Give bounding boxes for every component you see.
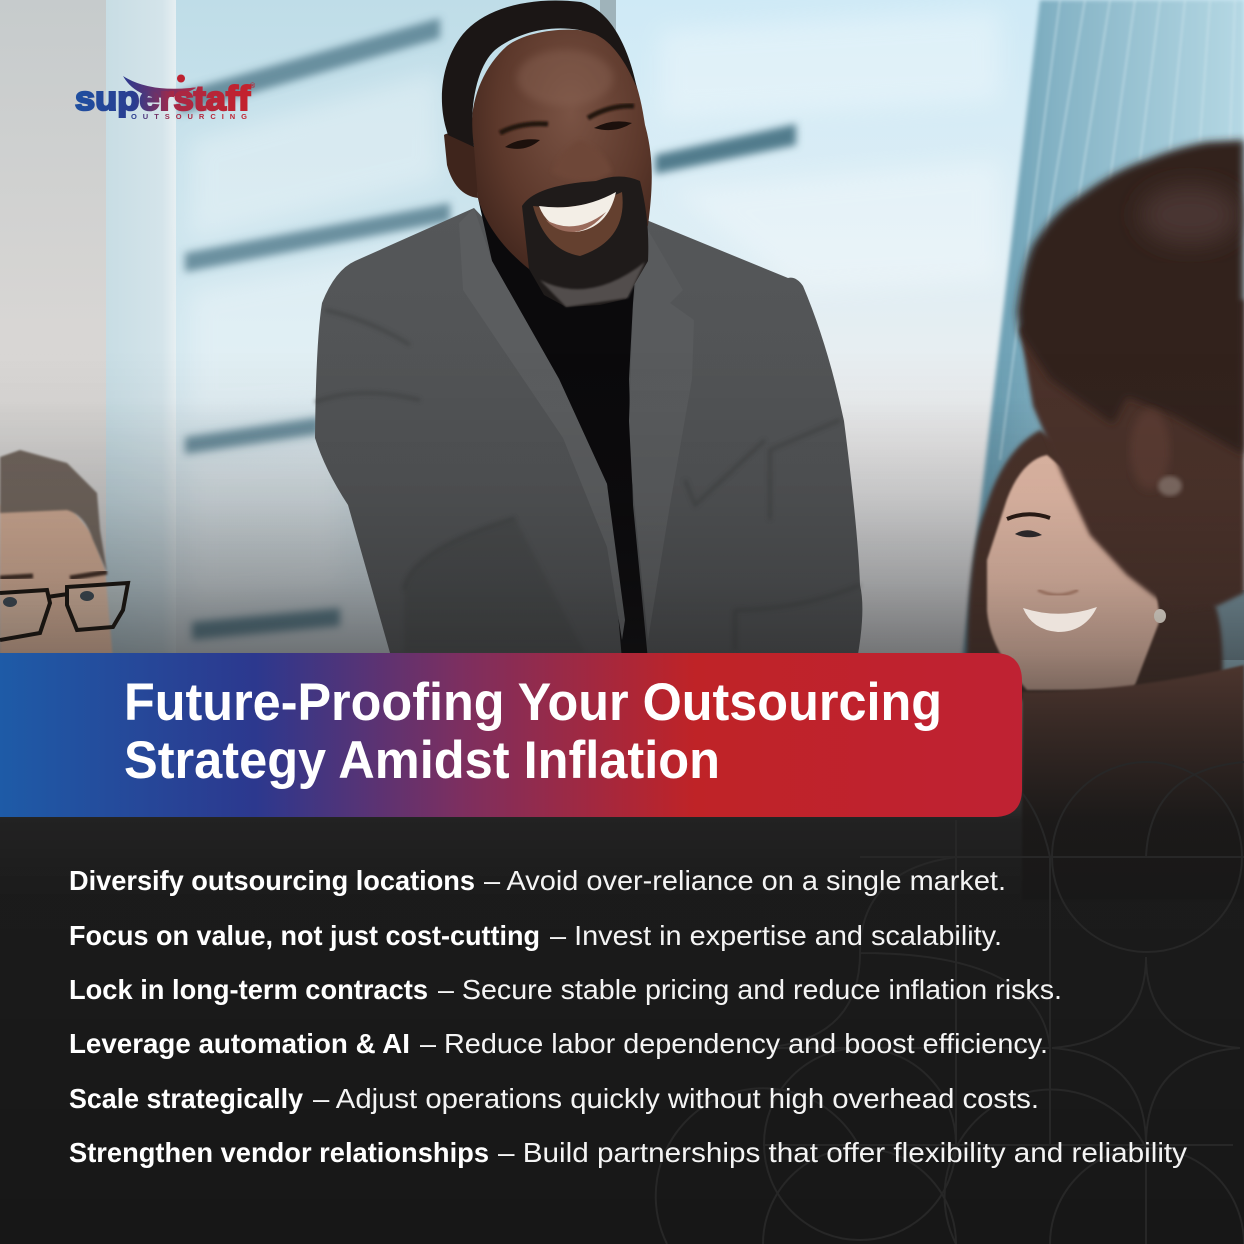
registered mark: ®	[250, 82, 256, 90]
item 6	[69, 1137, 1187, 1168]
title banner	[0, 653, 1022, 817]
logo: SuperStaff Outsourcing	[75, 74, 256, 121]
hair	[442, 0, 637, 147]
logo swoosh	[123, 76, 196, 98]
photo: smiling man in grey blazer	[315, 0, 862, 660]
eyes and brows	[505, 121, 632, 149]
title: Future-Proofing Your Outsourcing	[124, 673, 942, 732]
item 3	[69, 974, 1062, 1005]
item 2: – Invest in expertise and scalability.	[550, 920, 1002, 951]
item 4	[69, 1028, 1048, 1059]
item 6: – Build partnerships that offer flexibility and reliability	[498, 1137, 1187, 1168]
photo: man with glasses at left	[0, 450, 128, 660]
turtleneck	[478, 198, 648, 660]
list of strategies	[69, 865, 1187, 1168]
item 2	[69, 920, 1002, 951]
skin	[1020, 300, 1244, 611]
item 4: – Reduce labor dependency and boost efficiency.	[420, 1028, 1048, 1059]
photo: smiling woman at right	[967, 430, 1223, 700]
ear	[1130, 410, 1170, 490]
faint geometric line pattern	[656, 760, 1244, 1244]
item 2: Focus on value, not just cost-cutting	[69, 920, 540, 951]
forehead highlight	[517, 50, 613, 106]
shoulder	[1022, 665, 1244, 900]
title: Strategy Amidst Inflation	[124, 731, 720, 790]
lapel left	[459, 208, 625, 640]
logo subline: OUTSOURCING	[131, 112, 247, 121]
blazer	[315, 208, 862, 660]
logo wordmark: superstaff	[75, 80, 251, 118]
item 1: Diversify outsourcing locations	[69, 865, 475, 896]
face	[472, 30, 652, 307]
item 6: Strengthen vendor relationships	[69, 1137, 489, 1168]
item 3: Lock in long-term contracts	[69, 974, 428, 1005]
nose	[552, 140, 612, 181]
blazer folds	[315, 310, 860, 650]
hair	[1017, 140, 1244, 455]
item 1	[69, 865, 1006, 896]
item 5: Scale strategically	[69, 1083, 303, 1114]
item 5: – Adjust operations quickly without high overhead costs.	[313, 1083, 1039, 1114]
ear	[444, 133, 478, 198]
lapel right	[629, 223, 694, 640]
logo dot	[177, 74, 185, 82]
item 1: – Avoid over-reliance on a single market.	[484, 865, 1006, 896]
dark fade over lower photo	[0, 350, 1244, 1244]
chin and lip	[533, 192, 623, 256]
item 3: – Secure stable pricing and reduce inflation risks.	[438, 974, 1062, 1005]
title	[124, 673, 942, 790]
item 4: Leverage automation & AI	[69, 1028, 410, 1059]
smile	[539, 192, 616, 232]
beard	[522, 176, 648, 307]
woman's smile	[1023, 607, 1097, 632]
photo: foreground woman's head	[1017, 140, 1244, 900]
glasses	[0, 583, 128, 640]
